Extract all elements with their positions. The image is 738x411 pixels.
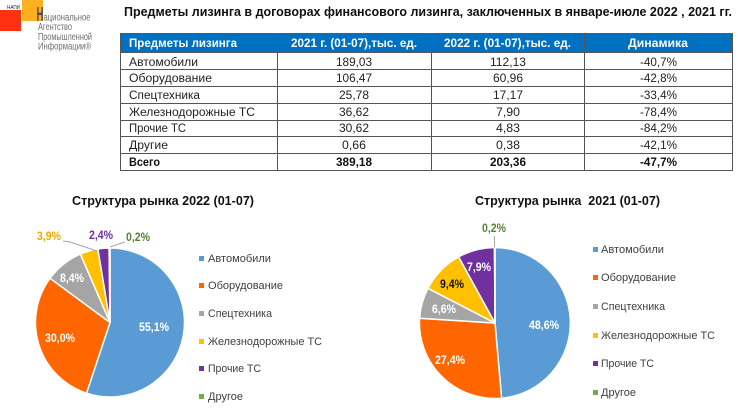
legend 2021: Другое	[601, 387, 636, 399]
table rows: 7,90	[496, 107, 520, 119]
pie chart 2021: 6,6%	[432, 302, 456, 316]
table rows: Оборудование	[129, 73, 212, 85]
logo: Агентство	[38, 22, 72, 33]
table rows: 25,78	[339, 90, 369, 102]
legend 2022: Оборудование	[208, 280, 283, 292]
legend 2021: Железнодорожные ТС	[601, 330, 715, 342]
table rows: -42,8%	[640, 73, 677, 85]
legend 2021: Оборудование	[601, 272, 676, 284]
heading: market structure 2021: Структура рынка 2021 (01-07)	[475, 194, 660, 208]
table header	[120, 33, 732, 53]
table rows: 203,36	[490, 157, 526, 169]
table rows: 106,47	[336, 73, 372, 85]
legend 2022: Спецтехника	[208, 308, 273, 320]
table header: 2022 г. (01-07),тыс. ед.	[444, 38, 571, 50]
table rows: -42,1%	[640, 140, 677, 152]
title: Предметы лизинга в договорах финансового лизинга, заключенных в январе-июле 2022 , 2021 гг.	[124, 5, 732, 19]
legend 2021: Спецтехника	[601, 301, 666, 313]
pie chart 2022: 8,4%	[60, 271, 84, 285]
legend 2022	[199, 253, 322, 403]
table rows: 30,62	[339, 123, 369, 135]
table rows: 112,13	[490, 57, 526, 69]
pie chart 2021: 48,6%	[529, 318, 559, 332]
table header: 2021 г. (01-07),тыс. ед.	[291, 38, 417, 50]
table rows: -47,7%	[640, 157, 677, 169]
table rows: 389,18	[336, 157, 373, 169]
logo: Промышленной	[38, 32, 92, 43]
table rows: -84,2%	[640, 123, 677, 135]
table rows: Другие	[129, 140, 168, 152]
legend 2022: Другое	[208, 391, 243, 403]
table rows: -78,4%	[640, 107, 677, 119]
table rows: 0,38	[496, 140, 520, 152]
pie chart 2022: 3,9%	[37, 229, 61, 243]
logo: Н	[36, 4, 44, 26]
pie chart 2022: 30,0%	[45, 331, 75, 345]
table rows: Автомобили	[129, 57, 198, 69]
pie chart 2021: 7,9%	[467, 260, 491, 274]
legend 2021: Прочие ТС	[601, 358, 654, 370]
pie chart 2022: 2,4%	[89, 228, 113, 242]
table rows: Железнодорожные ТС	[129, 107, 255, 119]
table rows: 4,83	[496, 123, 520, 135]
table rows: Прочие ТС	[129, 123, 186, 135]
table rows: 189,03	[336, 57, 372, 69]
pie chart 2021	[419, 221, 570, 398]
table rows: -33,4%	[640, 90, 677, 102]
table	[120, 33, 733, 170]
legend 2021: Автомобили	[601, 244, 664, 256]
table rows: -40,7%	[640, 57, 677, 69]
pie chart 2022	[35, 228, 184, 397]
legend 2022: Автомобили	[208, 253, 271, 265]
logo: НАПИ	[7, 5, 20, 11]
heading: market structure 2022: Структура рынка 2022 (01-07)	[72, 194, 254, 208]
legend 2022: Прочие ТС	[208, 363, 261, 375]
legend 2022: Железнодорожные ТС	[208, 336, 322, 348]
pie chart 2021: 27,4%	[435, 353, 465, 367]
table header: Динамика	[628, 38, 689, 50]
table rows: 60,96	[493, 73, 523, 85]
table rows: Всего	[129, 157, 160, 169]
table rows: Спецтехника	[129, 90, 201, 102]
table header: Предметы лизинга	[129, 38, 238, 50]
table rows: 17,17	[493, 90, 523, 102]
logo	[0, 0, 92, 52]
pie chart 2021: 0,2%	[482, 221, 506, 235]
table rows: 36,62	[339, 107, 369, 119]
legend 2021	[593, 244, 715, 399]
table rows: 0,66	[342, 140, 366, 152]
logo: ациональное	[44, 12, 91, 24]
pie chart 2021: 9,4%	[440, 277, 464, 291]
logo: Информации®	[38, 40, 91, 52]
pie chart 2022: 55,1%	[139, 320, 169, 334]
table rows	[129, 57, 677, 169]
pie chart 2022: 0,2%	[126, 230, 150, 244]
